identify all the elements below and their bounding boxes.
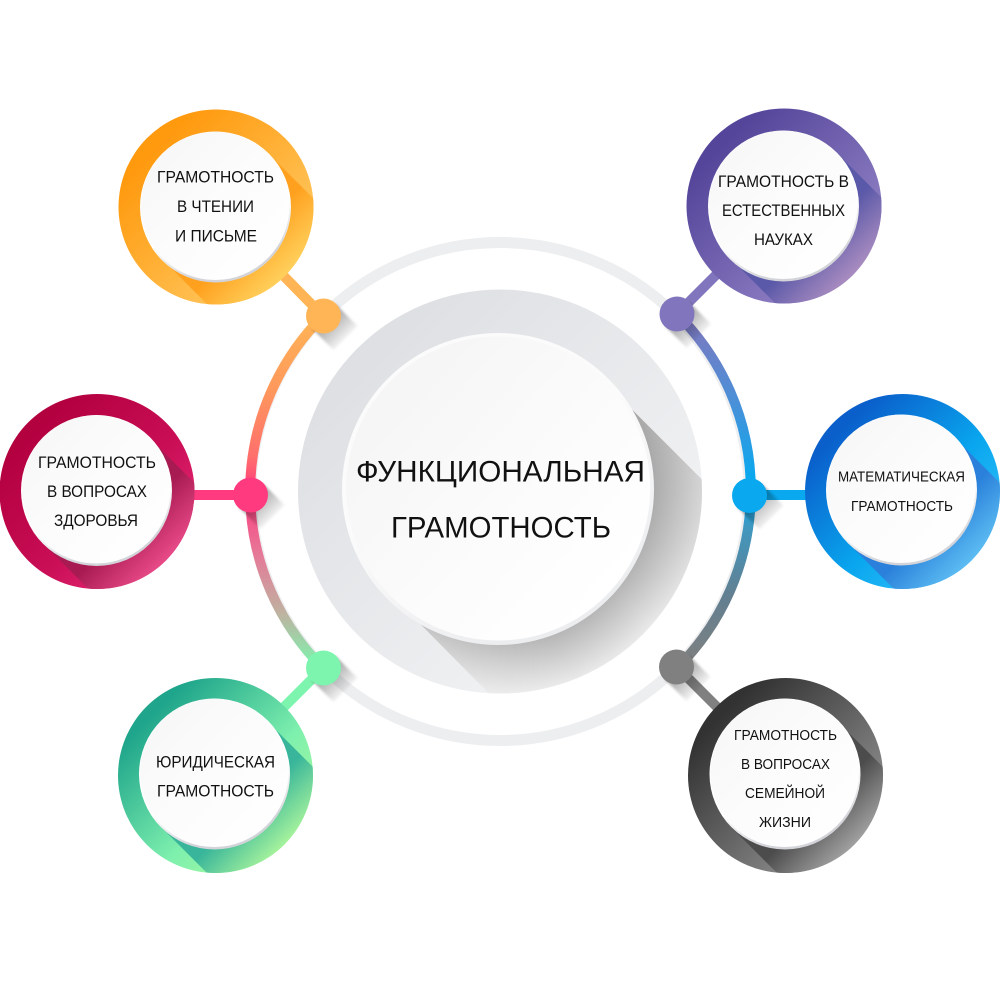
node shadow	[738, 484, 784, 530]
panel: mathematics	[805, 394, 1000, 589]
node shadow	[312, 304, 358, 350]
node dot	[306, 298, 341, 334]
red badge	[0, 394, 194, 589]
green badge label: ЮРИДИЧЕСКАЯ	[156, 754, 275, 772]
orange badge label: И ПИСЬМЕ	[175, 227, 257, 245]
central disc	[298, 290, 702, 694]
node: blue	[732, 478, 784, 530]
orange badge	[118, 110, 314, 304]
blue badge	[805, 394, 1000, 589]
purple badge label: ЕСТЕСТВЕННЫХ	[722, 202, 845, 220]
purple badge label: НАУКАХ	[754, 231, 813, 249]
connector: orange	[270, 262, 323, 316]
red badge label: В ВОПРОСАХ	[47, 483, 147, 501]
green badge	[118, 678, 313, 873]
purple badge label: ГРАМОТНОСТЬ В	[718, 173, 849, 191]
connector: green	[270, 668, 323, 721]
node shadow	[312, 656, 358, 702]
node: red	[233, 478, 284, 529]
central long shadow	[421, 410, 702, 691]
grey badge label: ЖИЗНИ	[759, 815, 811, 831]
panel: legal	[118, 678, 313, 873]
panel: health	[0, 394, 194, 589]
grey badge label: В ВОПРОСАХ	[741, 757, 830, 773]
panel: family life	[688, 678, 883, 873]
orange badge label	[157, 169, 274, 245]
node: orange	[306, 298, 358, 350]
title line 1: ФУНКЦИОНАЛЬНАЯ	[356, 456, 645, 488]
grey badge label: ГРАМОТНОСТЬ	[734, 728, 837, 744]
right coloured arc	[677, 314, 751, 668]
central face	[346, 336, 650, 640]
green badge label: ГРАМОТНОСТЬ	[157, 783, 274, 801]
node dot	[732, 478, 767, 513]
node shadow	[238, 483, 284, 529]
node: grey	[659, 650, 710, 701]
title line 2: ГРАМОТНОСТЬ	[391, 512, 611, 544]
node shadow	[664, 655, 710, 701]
central title	[356, 456, 645, 544]
green badge label	[156, 754, 275, 801]
blue badge label: ГРАМОТНОСТЬ	[851, 499, 953, 515]
connector: grey	[677, 667, 730, 720]
red badge label: ЗДОРОВЬЯ	[54, 512, 138, 530]
grey badge label: СЕМЕЙНОЙ	[745, 784, 825, 802]
node: purple	[660, 296, 711, 348]
node dot	[660, 296, 694, 332]
central disc base	[298, 290, 702, 694]
red badge label: ГРАМОТНОСТЬ	[38, 454, 156, 472]
outer grey ring	[251, 242, 749, 740]
left coloured arc	[250, 316, 323, 668]
purple badge label	[718, 173, 849, 249]
orange badge label: ГРАМОТНОСТЬ	[157, 169, 274, 187]
blue badge label: МАТЕМАТИЧЕСКАЯ	[838, 470, 965, 486]
grey badge	[688, 678, 883, 873]
node: green	[306, 650, 358, 702]
purple badge	[686, 108, 882, 304]
orange badge label: В ЧТЕНИИ	[177, 198, 254, 216]
blue badge label	[838, 470, 965, 515]
node dot	[659, 650, 694, 684]
node dot	[233, 478, 268, 512]
panel: reading and writing	[118, 110, 314, 304]
red badge label	[38, 454, 156, 530]
grey badge label	[734, 728, 837, 831]
panel: natural sciences	[686, 108, 882, 304]
node dot	[306, 650, 341, 686]
connector: red	[190, 490, 250, 500]
connector: purple	[677, 261, 730, 314]
connector: blue	[749, 490, 810, 500]
node shadow	[665, 302, 711, 348]
central rim	[342, 333, 654, 645]
